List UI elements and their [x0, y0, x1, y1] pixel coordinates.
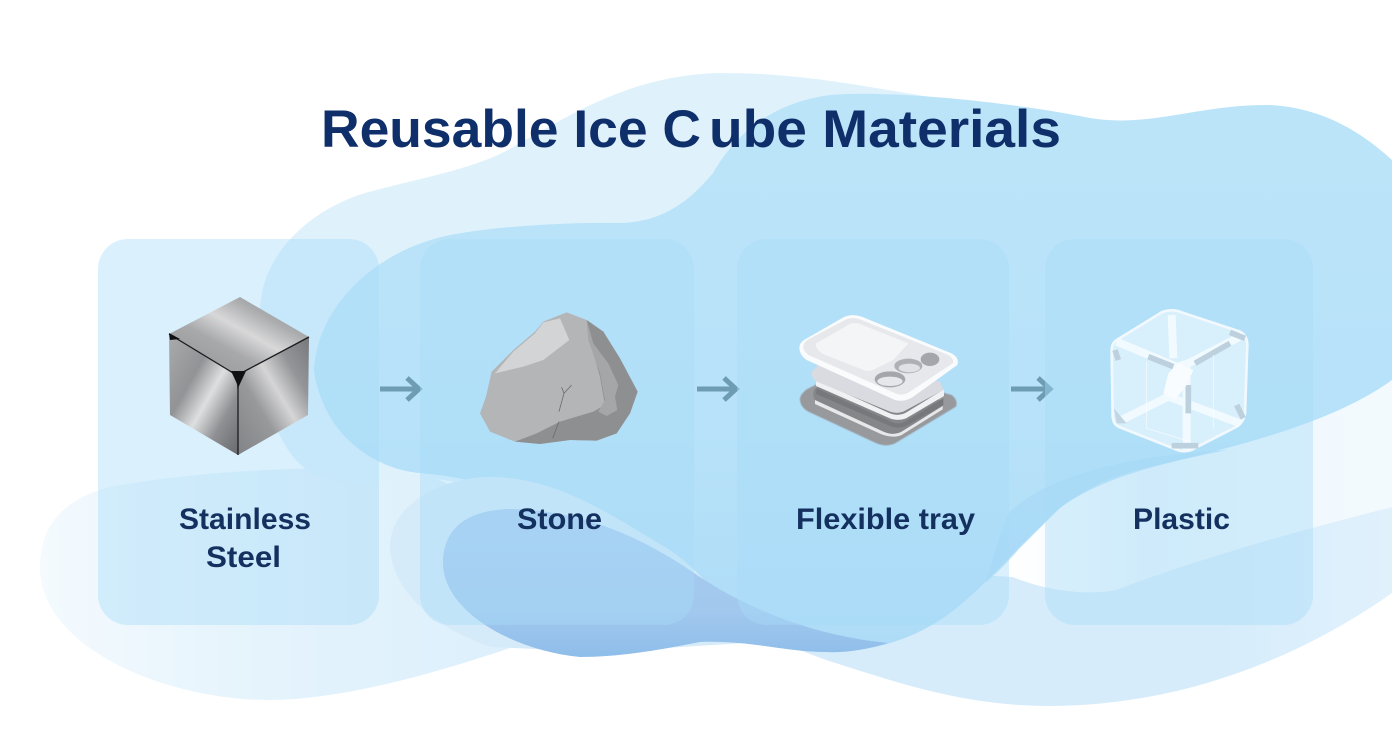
arrow: stone to tray — [697, 378, 736, 400]
background: upper pale blob — [259, 73, 1100, 490]
icon: stone — [480, 312, 638, 444]
background: light overlay wave — [390, 477, 760, 652]
background: right pale glow — [990, 380, 1392, 592]
title: Reusable Ice C — [321, 100, 701, 159]
card background — [1045, 239, 1313, 625]
label: Stone: Stone — [517, 503, 602, 536]
label: Plastic: Plastic — [1133, 503, 1230, 536]
label: Stainless Steel: Steel — [206, 541, 281, 574]
background: darker bottom blob — [443, 509, 888, 657]
background: large blue blob — [314, 94, 1392, 652]
card background — [98, 239, 379, 625]
title: ube Materials — [709, 100, 1061, 159]
card background — [737, 239, 1009, 625]
icon: flexible tray — [799, 315, 958, 445]
arrow: tray to plastic — [1011, 378, 1050, 400]
background: deeper band in blue blob — [985, 450, 1228, 583]
background: lower left wave — [40, 468, 540, 700]
label: Stainless Steel: Stainless — [179, 503, 311, 536]
panel: stainless steel — [98, 239, 379, 625]
background: lower right wave — [700, 507, 1392, 706]
card background — [420, 239, 694, 625]
icon: plastic cube — [1112, 310, 1247, 451]
panel: plastic — [1045, 239, 1313, 625]
panel: flexible tray — [737, 239, 1009, 625]
label: Flexible tray: Flexible tray — [796, 503, 975, 536]
arrow: steel to stone — [380, 378, 419, 400]
icon: steel cube — [169, 297, 309, 455]
panel: stone — [420, 239, 694, 625]
